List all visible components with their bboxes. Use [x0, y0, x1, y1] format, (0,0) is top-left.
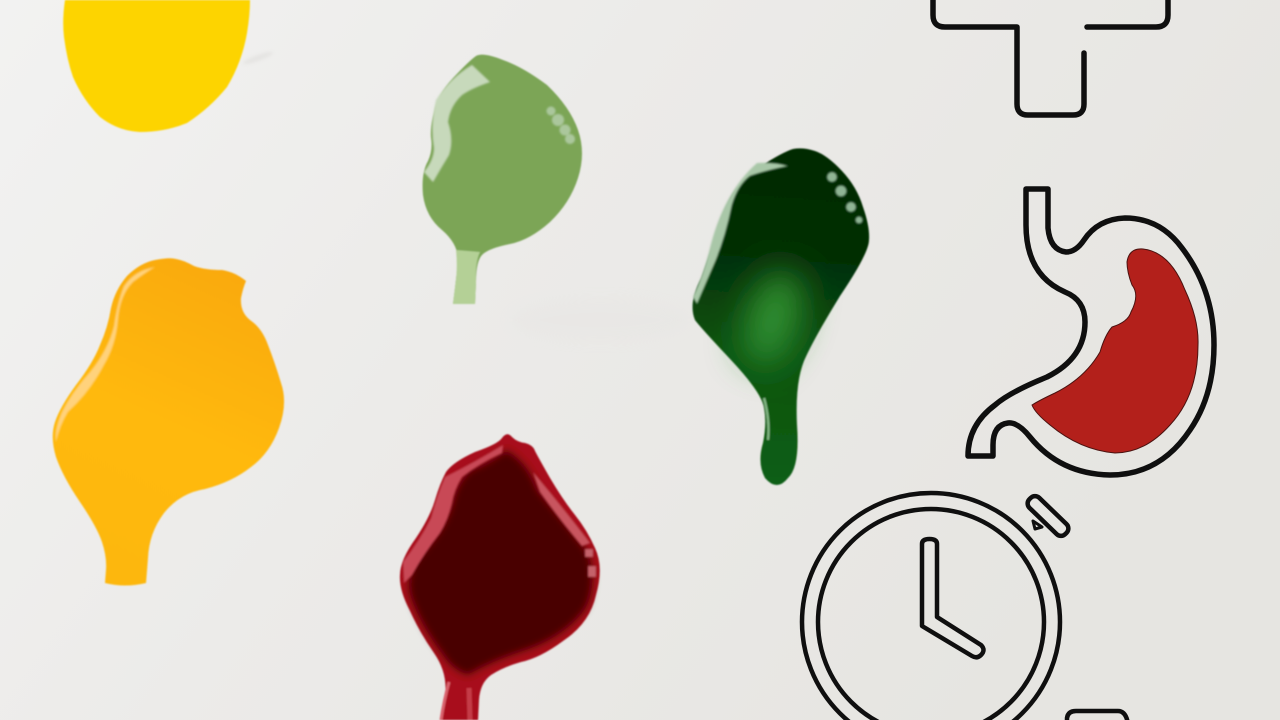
- icon: medical cross outline: [933, 0, 1168, 115]
- crown connector: [1033, 521, 1042, 529]
- watch rings: [802, 493, 1060, 720]
- watch hands: [922, 539, 984, 657]
- stomach outline: [968, 189, 1214, 475]
- stomach red fill: [1032, 249, 1198, 453]
- blob: light green: [423, 55, 582, 304]
- blob: dark red: [400, 434, 600, 720]
- blob: yellow: [63, 0, 250, 132]
- icon: stomach: [968, 189, 1214, 475]
- blob: dark green: [693, 148, 869, 485]
- bottom button: [1067, 711, 1128, 720]
- icon: stopwatch: [802, 493, 1128, 720]
- blob: orange: [53, 258, 284, 586]
- crown button: [1025, 494, 1071, 538]
